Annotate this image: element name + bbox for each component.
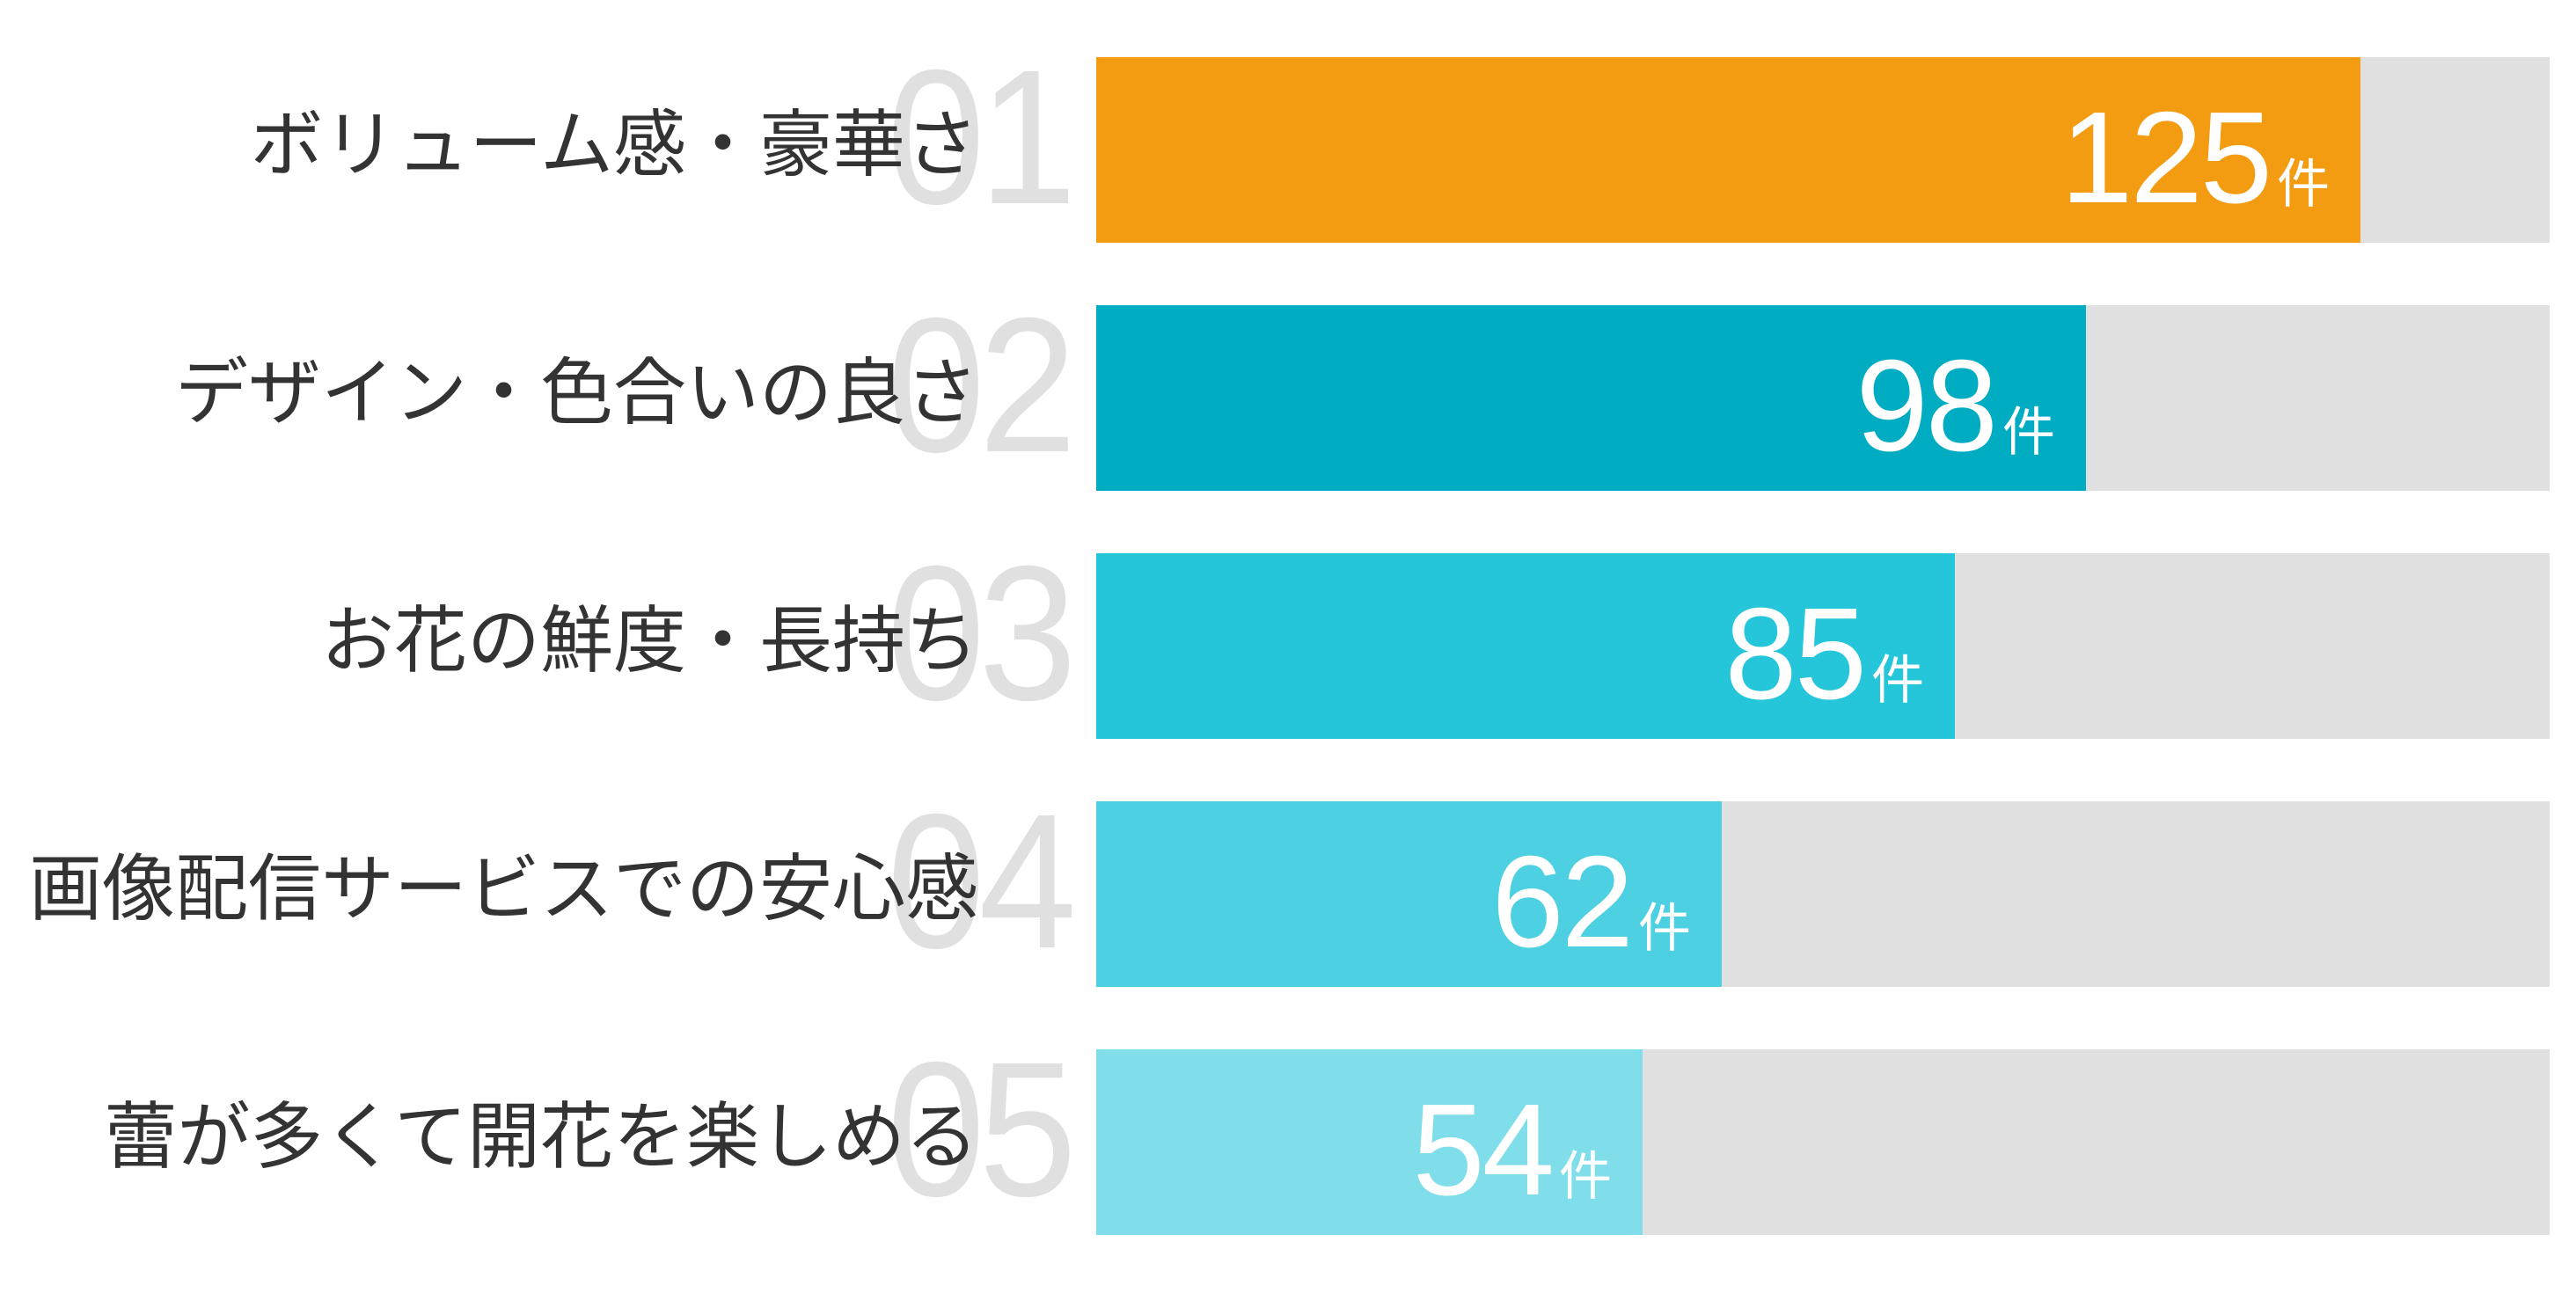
row 3 (321, 527, 2550, 741)
bar 3 (1096, 553, 2550, 739)
rank number 05: 05 (887, 1023, 1070, 1237)
rank number 04: 04 (887, 775, 1070, 989)
label 4: 画像配信サービスでの安心感 (29, 848, 978, 930)
bar 5: 54件 (1412, 1078, 1612, 1223)
bar 5 (1096, 1049, 2550, 1235)
bar 4 (1096, 801, 2550, 987)
bar 2: 98件 (1855, 333, 2055, 478)
bar 4: 62件 (1491, 829, 1691, 975)
bar 3: 85件 (1724, 581, 1924, 727)
rank number 02: 02 (887, 279, 1070, 493)
bar 1: 125件 (2060, 85, 2330, 230)
rank number 03: 03 (887, 527, 1070, 741)
label 5: 蕾が多くて開花を楽しめる (104, 1096, 978, 1178)
label 3: お花の鮮度・長持ち (321, 600, 978, 682)
rank number 01: 01 (887, 31, 1070, 245)
bar 2 (1096, 305, 2550, 491)
row 5 (104, 1023, 2550, 1237)
row 1 (250, 31, 2550, 245)
bar 1 (1096, 57, 2550, 243)
label 1: ボリューム感・豪華さ (250, 104, 978, 186)
row 4 (29, 775, 2550, 989)
label 2: デザイン・色合いの良さ (175, 352, 978, 434)
row 2 (175, 279, 2550, 493)
